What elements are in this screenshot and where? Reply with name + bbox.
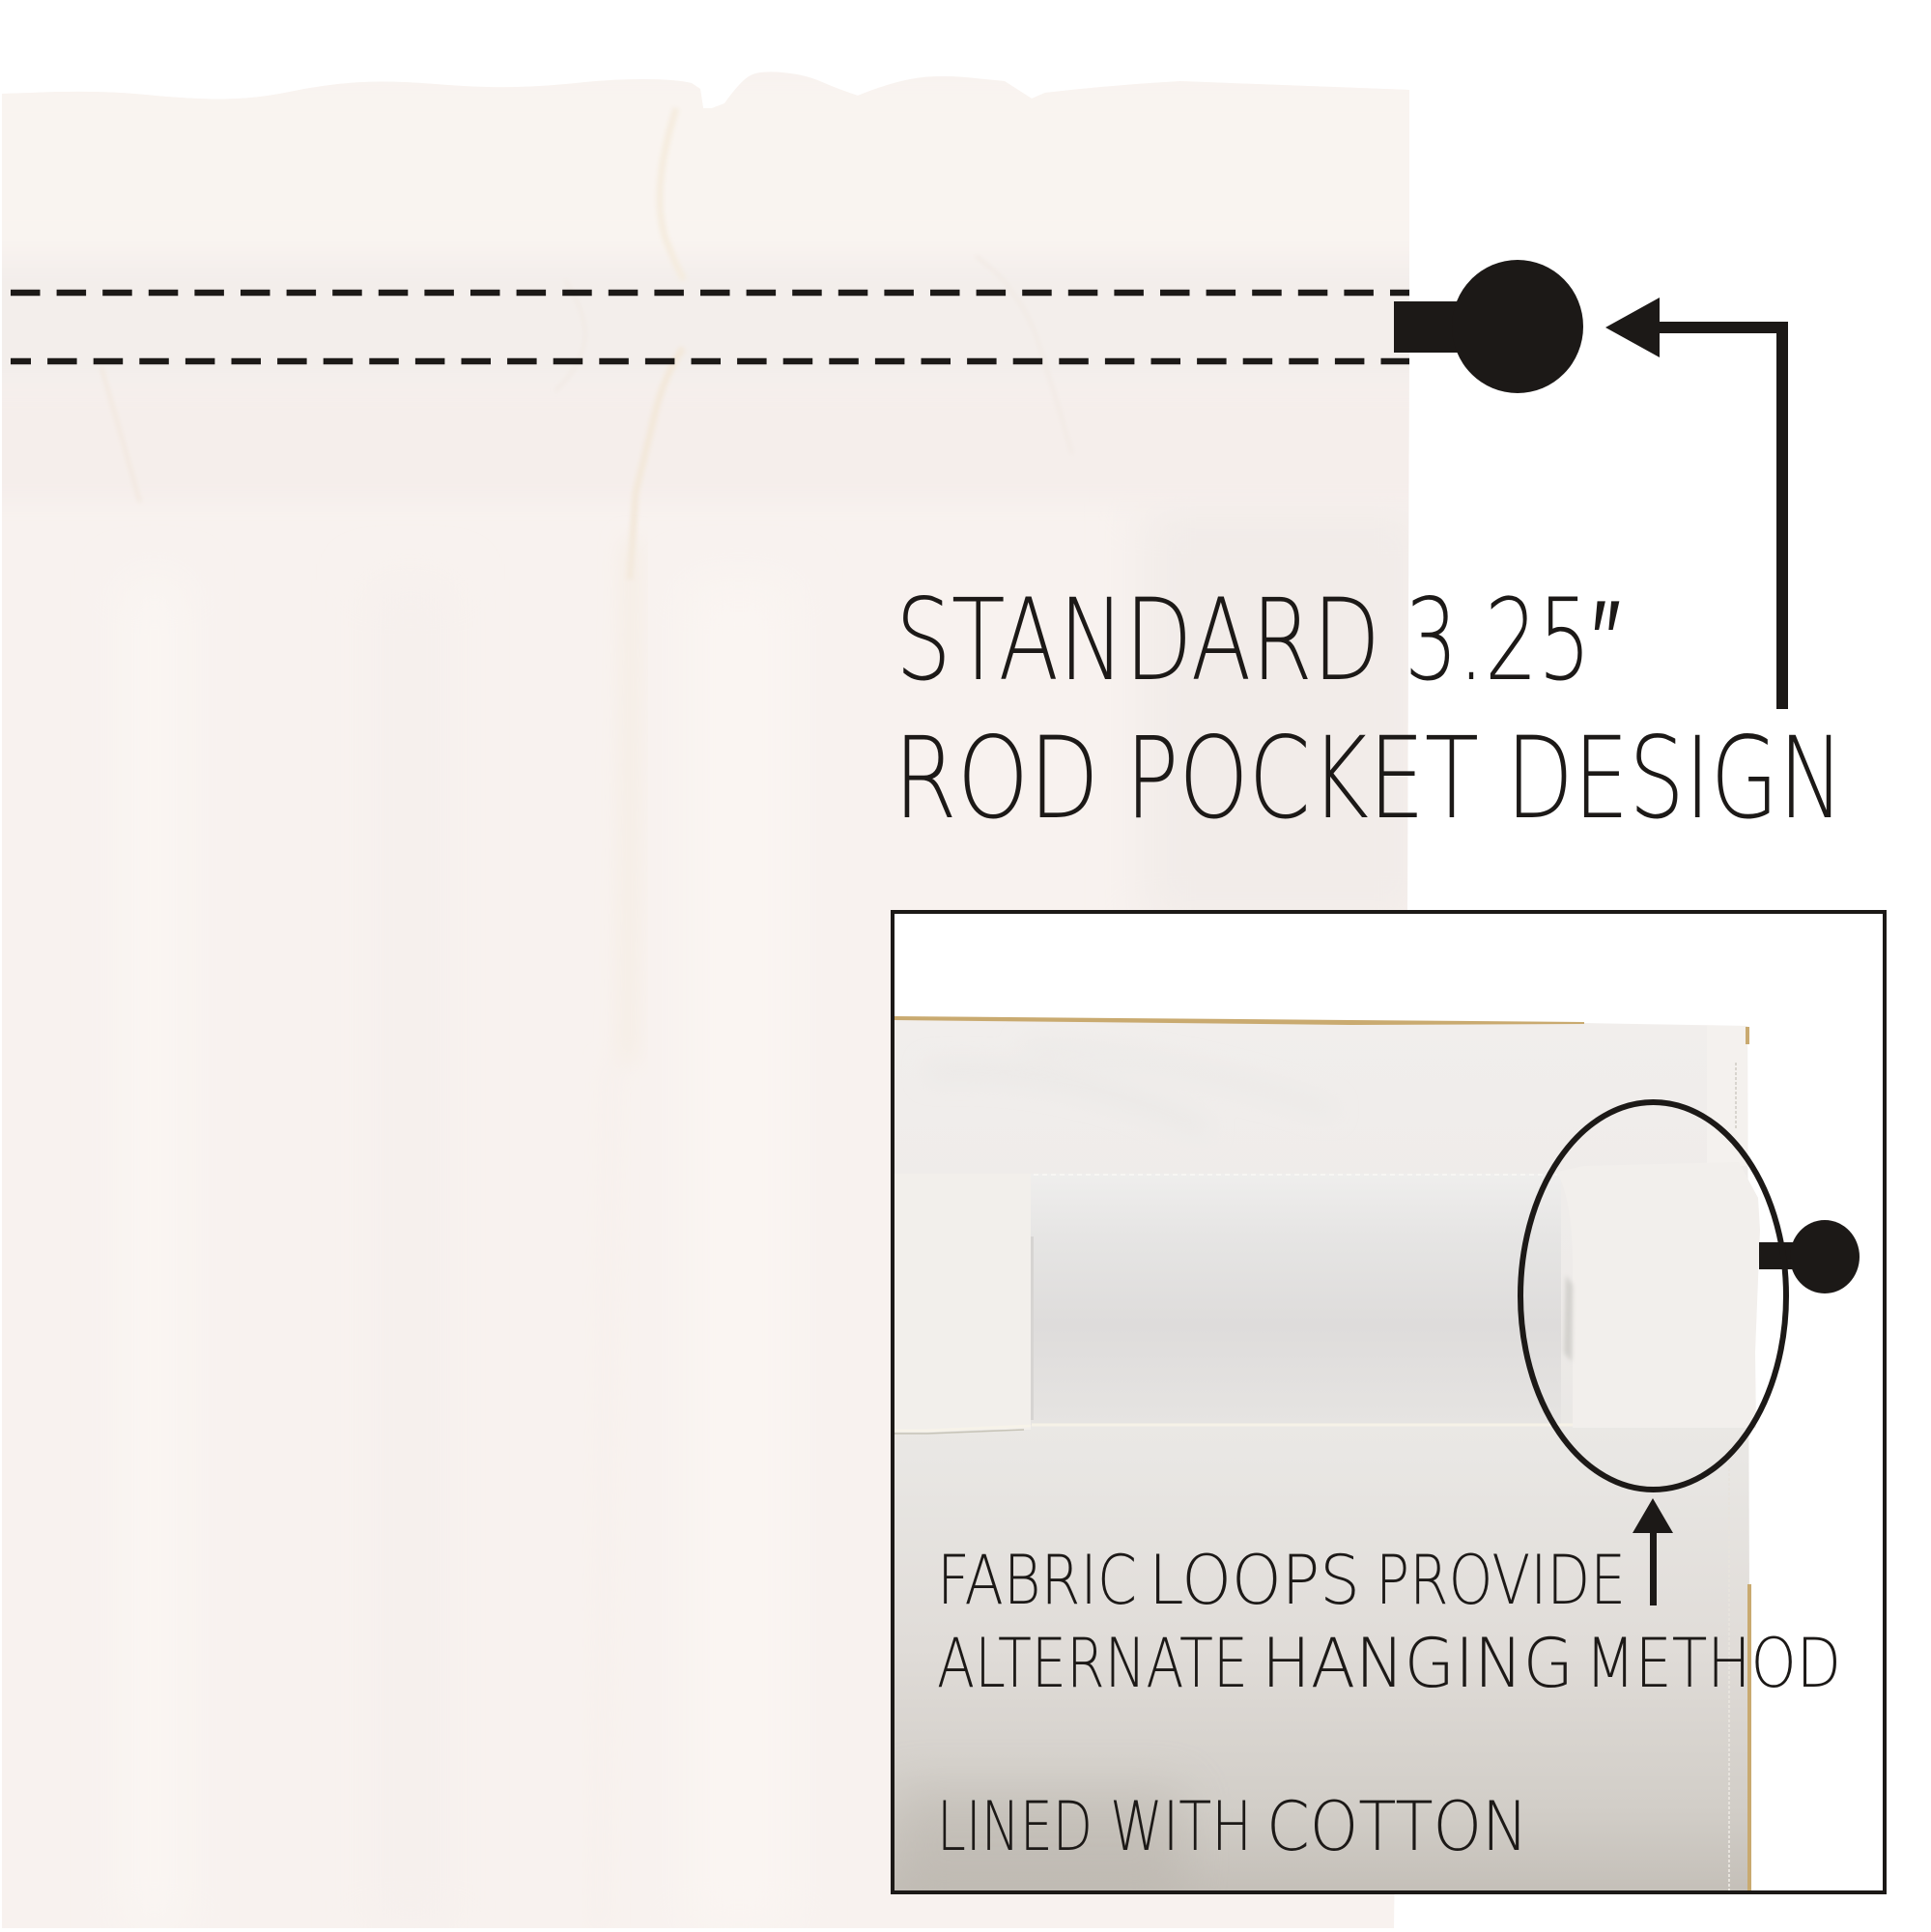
text: fabric loops: PROVIDE bbox=[1376, 1541, 1626, 1620]
arrow: to rod bbox=[1605, 298, 1788, 709]
text: fabric loops: HANGING bbox=[1262, 1624, 1574, 1703]
heading: rod pocket callout bbox=[894, 574, 1844, 844]
dashed lines: rod pocket bottom bbox=[11, 358, 1409, 364]
text: fabric loops: FABRIC bbox=[937, 1541, 1137, 1620]
heading: rod pocket callout: STANDARD bbox=[895, 574, 1380, 706]
heading: rod pocket callout: POCKET bbox=[1125, 712, 1479, 844]
text: fabric loops: ALTERNATE bbox=[937, 1624, 1248, 1703]
heading: rod pocket callout: ROD bbox=[894, 712, 1099, 844]
text: fabric loops: METHOD bbox=[1585, 1624, 1841, 1703]
icon: small curtain rod bbox=[1759, 1220, 1860, 1293]
arrow: to loop bbox=[1633, 1498, 1673, 1605]
callout ring around loop bbox=[1520, 1102, 1786, 1490]
curtain photo bbox=[0, 58, 1468, 1932]
panel: inset back of curtain bbox=[895, 914, 1760, 1890]
dashed lines: rod pocket top bbox=[11, 290, 1409, 296]
text: lining: WITH bbox=[1110, 1787, 1252, 1866]
heading: rod pocket callout: DESIGN bbox=[1506, 712, 1844, 844]
text: lining: COTTON bbox=[1266, 1787, 1528, 1866]
heading: rod pocket callout: 3.25″ bbox=[1405, 574, 1621, 706]
photo: curtain back lining bbox=[895, 1014, 1754, 1903]
inset border bbox=[893, 912, 1885, 1892]
text: lining: LINED bbox=[937, 1787, 1093, 1866]
icon: curtain rod bbox=[1394, 260, 1583, 393]
text: fabric loops bbox=[937, 1541, 1841, 1703]
fabric tan edges bbox=[895, 1016, 1751, 1890]
loop shadow bbox=[1564, 1275, 1573, 1362]
photo: right fabric loop bbox=[1557, 1162, 1760, 1428]
text: fabric loops: LOOPS bbox=[1149, 1541, 1360, 1620]
